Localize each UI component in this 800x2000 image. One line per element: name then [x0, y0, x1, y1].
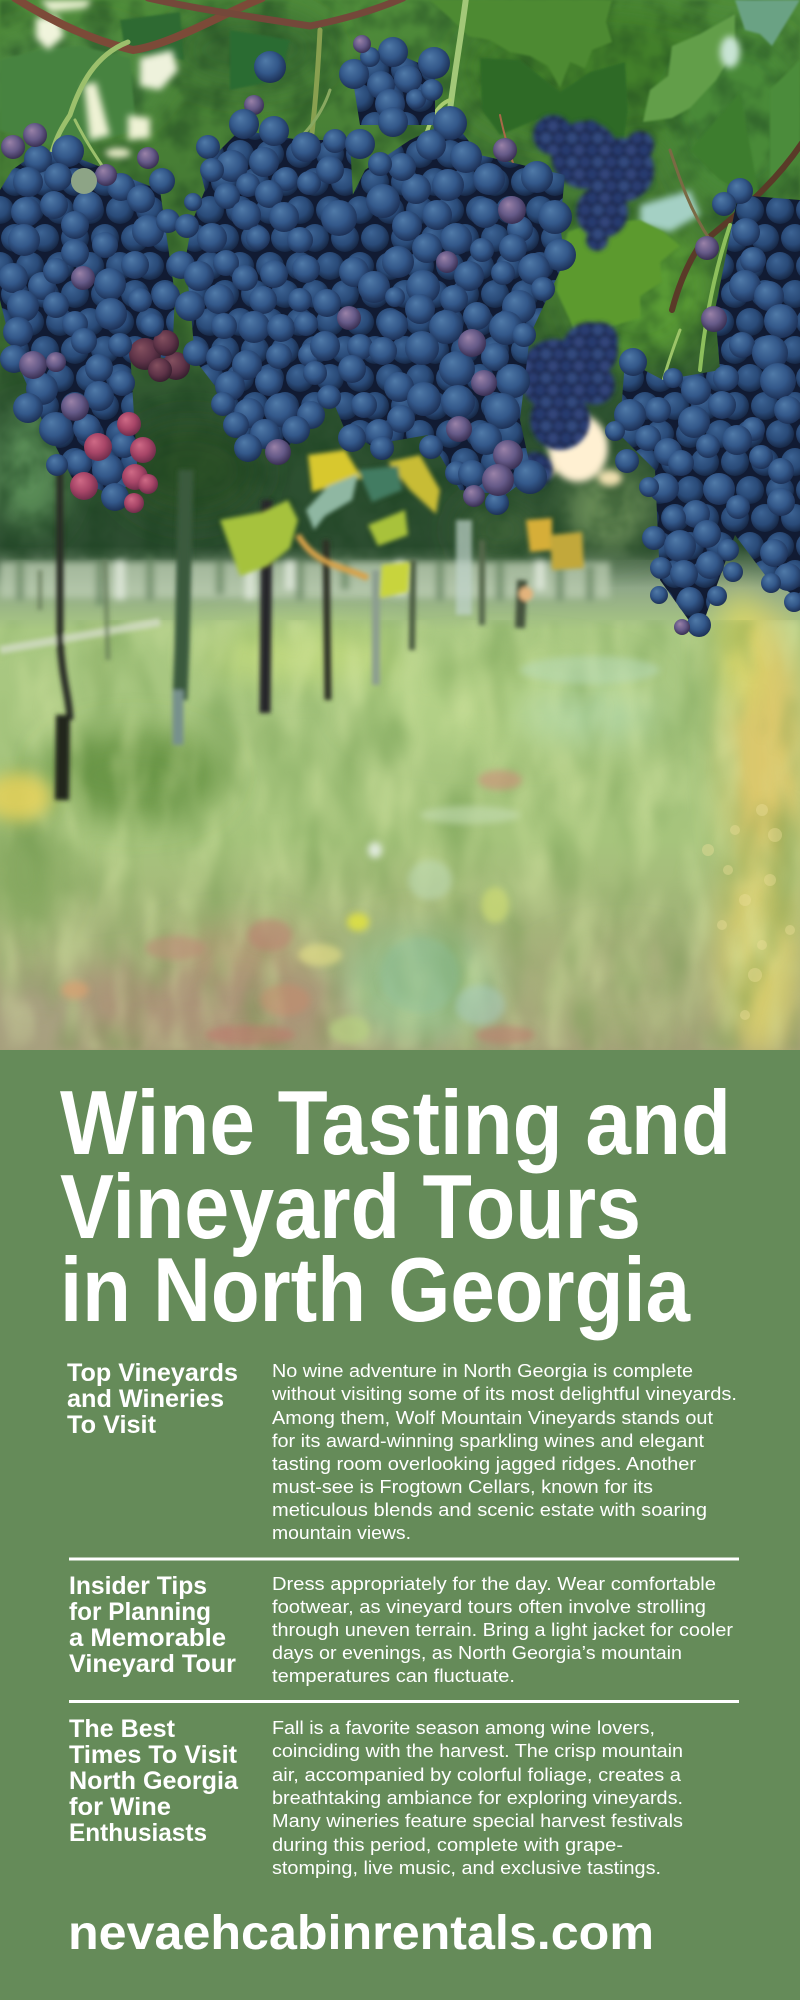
section 1: body text	[271, 1361, 737, 1543]
section 2: body text: Dress appropriately for the day. Wear comfortable	[272, 1574, 716, 1594]
foliage: mottled leaf shadow texture	[0, 0, 800, 560]
section 3: body text: Fall is a favorite season among wine lovers,	[272, 1718, 655, 1738]
grape cluster: dark background, lower centre-right	[517, 322, 618, 488]
vine branches and stems	[15, 0, 800, 460]
grape cluster: middle bunch	[167, 51, 360, 465]
section 3: body text: air, accompanied by colorful foliage, creates a	[272, 1765, 682, 1785]
section 2: heading: Insider Tips	[69, 1572, 207, 1600]
section 1: body text: mountain views.	[272, 1523, 411, 1543]
section 3: body text	[272, 1718, 683, 1878]
leaves: yellow and teal leaves under the clusters	[220, 450, 584, 598]
section 3: body text: breathtaking ambiance for exploring vineyards.	[272, 1788, 683, 1808]
background gradient	[0, 0, 800, 1050]
website url: nevaehcabinrentals.com	[68, 1907, 654, 1960]
section 2: body text: temperatures can fluctuate.	[272, 1666, 515, 1686]
grape cluster: main centre bunch	[294, 106, 576, 515]
grape cluster: right bunch	[605, 178, 800, 637]
photo: grape clusters hanging over a vineyard row	[0, 0, 800, 1050]
section 1: body text: tasting room overlooking jagged ridges. Another	[272, 1454, 696, 1474]
section 3: body text: during this period, complete with grape-	[272, 1835, 623, 1855]
section 1: body text: meticulous blends and scenic estate with soaring	[272, 1500, 707, 1520]
section 1: heading: To Visit	[67, 1411, 157, 1439]
section 1: heading: and Wineries	[67, 1385, 224, 1413]
section 2: body text	[272, 1574, 733, 1686]
sunlit yellow patch at left edge	[0, 773, 52, 821]
section 3: body text: coinciding with the harvest. The crisp mountain	[272, 1741, 683, 1761]
section 1: body text: without visiting some of its most delightful vineyards.	[271, 1384, 737, 1404]
vine trunks and fence	[0, 470, 533, 800]
section 3: heading: Enthusiasts	[69, 1819, 207, 1847]
section 3: body text: Many wineries feature special harvest festivals	[272, 1811, 683, 1831]
section 1: heading	[67, 1359, 238, 1439]
title: Vineyard Tours	[60, 1157, 641, 1258]
grape cluster: top small bunch	[339, 35, 450, 125]
section 1: heading: Top Vineyards	[67, 1359, 238, 1387]
section 1: body text: must-see is Frogtown Cellars, known for its	[272, 1477, 653, 1497]
leaves: bright leaf beside the centre cluster	[556, 220, 680, 362]
section 1: body text: for its award-winning sparkling wines and elegant	[272, 1431, 704, 1451]
section 3: heading: Times To Visit	[69, 1741, 238, 1769]
section 2: heading	[69, 1572, 236, 1678]
section 2: heading: Vineyard Tour	[69, 1650, 236, 1678]
leaves: canopy foliage top	[0, 0, 800, 200]
section 2: body text: through uneven terrain. Bring a light jacket for cooler	[272, 1620, 733, 1640]
section 2: body text: footwear, as vineyard tours often involve strolling	[272, 1597, 706, 1617]
sun flare behind the clusters	[540, 401, 622, 486]
section 2: heading: for Planning	[69, 1598, 211, 1626]
foliage: blurred canopy colours	[0, 0, 800, 560]
section 2: heading: a Memorable	[69, 1624, 226, 1652]
bokeh dots on the sunny right edge	[702, 804, 795, 1020]
section 3: heading: The Best	[69, 1715, 176, 1743]
section 3: heading	[69, 1715, 239, 1847]
section 3: body text: stomping, live music, and exclusive tastings.	[272, 1858, 661, 1878]
grape cluster: dark background, upper right	[533, 115, 654, 251]
grass: streak texture	[0, 620, 800, 1050]
grass: blurred ground patches	[0, 590, 800, 1060]
section 1: body text: No wine adventure in North Georgia is complete	[272, 1361, 693, 1381]
grape cluster: left bunch	[0, 123, 190, 513]
section 2: body text: days or evenings, as North Georgia’s mountain	[272, 1643, 682, 1663]
sunlight through the canopy	[36, 0, 740, 232]
title	[60, 1073, 731, 1341]
grass: darker streak texture	[0, 620, 800, 1050]
section 3: heading: North Georgia	[69, 1767, 239, 1795]
section 3: heading: for Wine	[69, 1793, 171, 1821]
title: Wine Tasting and	[60, 1073, 731, 1174]
distant row: pale strip with vertical streaks	[0, 555, 610, 605]
title: in North Georgia	[60, 1240, 691, 1341]
ground bokeh: flowers and low plant	[61, 656, 660, 1045]
panel: green content area	[60, 1073, 739, 1960]
section 1: body text: Among them, Wolf Mountain Vineyards stands out	[272, 1408, 713, 1428]
